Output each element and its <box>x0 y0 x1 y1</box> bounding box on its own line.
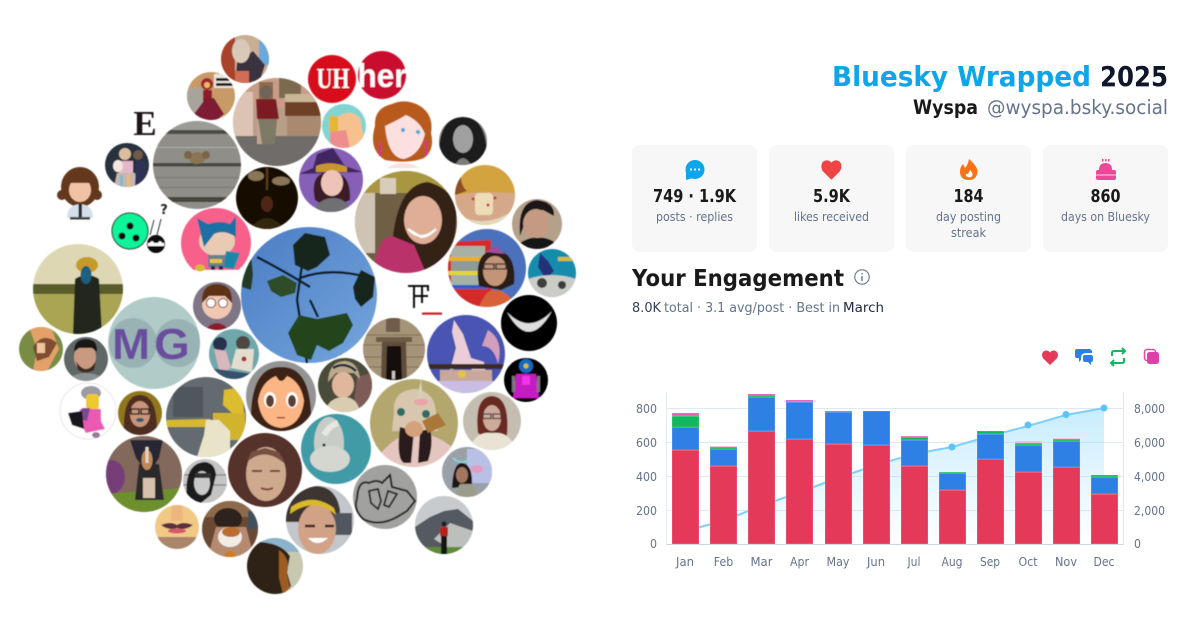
icon: info <box>855 270 869 284</box>
avatar: curly red-haired cartoon <box>373 101 432 168</box>
month labels: Aug <box>942 555 962 569</box>
panel: day posting streak: 184 <box>954 186 984 207</box>
avatar: ginkgo leaf on blue sky <box>241 227 377 363</box>
avatar: Mona Lisa style drawing <box>228 433 302 507</box>
avatar: MG logo: MG <box>112 320 194 369</box>
avatar: pixel robot <box>504 358 548 402</box>
heading: your engagement: Your Engagement <box>631 264 844 292</box>
engagement summary: 8.0K <box>632 300 662 316</box>
right axis labels: 0 <box>1134 537 1141 551</box>
left axis labels: 800 <box>636 402 657 416</box>
legend: heart <box>1042 351 1058 365</box>
month labels: Apr <box>790 555 809 569</box>
avatar: UH logo: UH <box>316 64 350 95</box>
avatar: cheshire smile <box>501 295 557 351</box>
avatar: boy with glasses <box>193 282 241 330</box>
avatar: hiker and mountains <box>415 496 473 555</box>
right axis labels <box>1134 402 1165 551</box>
panel: day posting streak: streak <box>951 226 986 240</box>
icon: heart <box>821 160 841 180</box>
avatar: person with cat <box>221 35 269 83</box>
engagement summary: total · 3.1 avg/post · Best in <box>664 300 840 316</box>
avatar: woman in front of screen <box>442 447 492 497</box>
panel: likes received: 5.9K <box>813 186 851 207</box>
legend: reposts <box>1111 348 1125 366</box>
avatar: yellow cartoon figure <box>165 377 246 457</box>
month labels: Jul <box>907 555 920 569</box>
right axis labels: 8,000 <box>1134 402 1165 416</box>
avatar: batman cartoon <box>181 208 251 279</box>
avatar: Jane Austen portrait <box>318 358 372 412</box>
avatar: woman with rainbow bookshelf <box>448 229 526 307</box>
legend: replies <box>1075 349 1093 365</box>
icon: green bug avatar <box>112 203 168 253</box>
left axis labels: 400 <box>636 470 657 484</box>
panel: days on Bluesky <box>1043 145 1168 252</box>
panel: days on Bluesky: 860 <box>1090 186 1120 207</box>
panel: posts and replies: posts · replies <box>656 210 733 224</box>
left axis labels <box>636 402 657 551</box>
avatar: mouse peeking through boards <box>153 121 241 209</box>
engagement summary: March <box>843 300 884 316</box>
panel: posts and replies: 749 · 1.9K <box>653 186 737 207</box>
month labels: Nov <box>1055 555 1077 569</box>
bars <box>672 394 1118 544</box>
avatar: sunset profile <box>247 538 303 594</box>
legend: quotes <box>1144 350 1159 364</box>
left axis labels: 0 <box>650 537 657 551</box>
avatar: couple in colourful dress <box>105 143 149 187</box>
icon: speech bubble <box>686 160 704 180</box>
avatar: white fox and shrine <box>427 315 505 393</box>
avatar: person eating <box>202 501 258 559</box>
month labels: Mar <box>750 555 773 569</box>
avatar: E logo: E <box>133 104 157 143</box>
month labels: Feb <box>714 555 733 569</box>
avatar: dark portrait with lamp <box>236 167 298 229</box>
title: 2025 <box>1100 60 1168 93</box>
month labels: May <box>826 555 850 569</box>
right axis labels: 2,000 <box>1134 504 1165 518</box>
avatar: UH logo <box>308 55 356 103</box>
month labels: Oct <box>1018 555 1038 569</box>
avatar: Simpsons character in pink <box>60 383 116 439</box>
user name and handle <box>913 96 1168 119</box>
avatar: woman with red hair and glasses <box>463 392 521 450</box>
avatar: bearded man <box>64 337 108 381</box>
avatar: beluga whale <box>301 414 371 484</box>
avatar: black and white portrait <box>183 459 227 503</box>
left axis labels: 600 <box>636 436 657 450</box>
right axis labels: 4,000 <box>1134 470 1165 484</box>
panel: day posting streak <box>906 145 1031 252</box>
panel: likes received <box>769 145 894 252</box>
avatar: stone doorway <box>363 318 425 380</box>
month labels: Jun <box>866 555 885 569</box>
month labels: Sep <box>980 555 1000 569</box>
avatar: anime girl <box>246 361 316 431</box>
user name and handle: @wyspa.bsky.social <box>987 96 1168 119</box>
avatar: Lucario and controller <box>528 249 576 297</box>
avatar: person in unicorn hoodie <box>370 379 458 467</box>
avatar: pixel girl with tie <box>57 167 102 220</box>
avatar: teal anime couple <box>209 329 259 379</box>
avatar: smiling woman with headband <box>286 486 354 554</box>
avatar: moustache <box>155 505 199 549</box>
avatar: woman with dark hair <box>512 199 562 249</box>
avatar: witch illustration <box>299 148 363 212</box>
panel: posts and replies <box>632 145 757 252</box>
month labels: Jan <box>675 555 694 569</box>
chart: monthly engagement <box>636 392 1165 569</box>
avatar cluster <box>19 35 576 594</box>
avatar: dog <box>97 436 182 512</box>
avatar: iron man dress <box>187 72 235 120</box>
left axis labels: 200 <box>636 504 657 518</box>
month labels: Dec <box>1094 555 1114 569</box>
right axis labels: 6,000 <box>1134 436 1165 450</box>
avatar: scribble drawing <box>353 465 417 529</box>
icon: cake <box>1096 159 1116 180</box>
avatar: black and white woman <box>439 117 487 165</box>
month labels <box>675 555 1114 569</box>
avatar: her logo: her <box>358 57 407 94</box>
avatar: F logo <box>408 286 442 315</box>
avatar: main smiling woman <box>355 171 457 273</box>
avatar: person in red sweater in palace room <box>233 78 321 166</box>
avatar: pumpkin head painting <box>33 244 123 334</box>
icon: flame <box>960 159 978 180</box>
user name and handle: Wyspa <box>913 96 978 119</box>
icon: green bug avatar: ? <box>160 203 168 218</box>
avatar: woman with glasses and autumn leaves <box>118 391 162 435</box>
avatar: otter with phone <box>322 104 366 148</box>
avatar: orange figure illustration <box>19 327 63 371</box>
avatar: MG logo <box>108 297 201 389</box>
panel: likes received: likes received <box>794 210 869 224</box>
panel: day posting streak: day posting <box>936 210 1001 224</box>
panel: days on Bluesky: days on Bluesky <box>1061 210 1150 224</box>
avatar: woman drinking from a cup <box>455 165 515 225</box>
title: Bluesky Wrapped <box>832 60 1091 93</box>
